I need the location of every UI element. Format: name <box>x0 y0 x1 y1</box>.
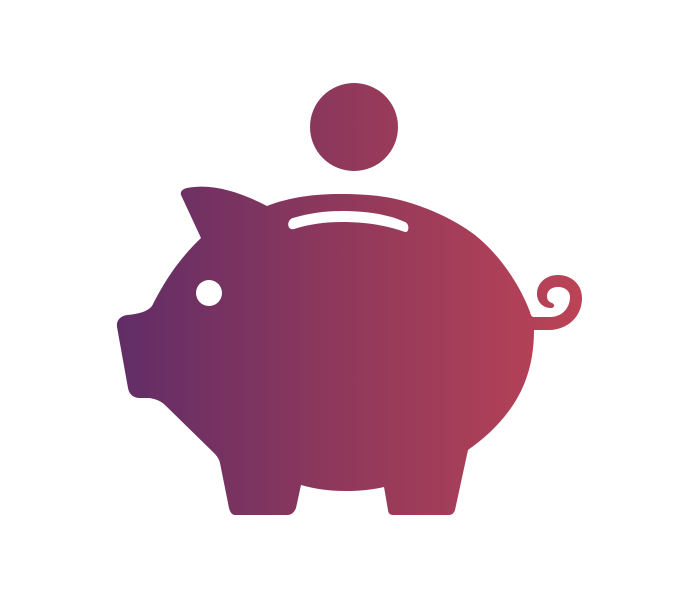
pig slot <box>288 211 408 232</box>
pig tail <box>532 275 582 330</box>
icon: coin <box>310 83 398 171</box>
icon: pig <box>117 187 582 515</box>
pig eye <box>196 280 222 306</box>
pig body <box>117 187 534 515</box>
